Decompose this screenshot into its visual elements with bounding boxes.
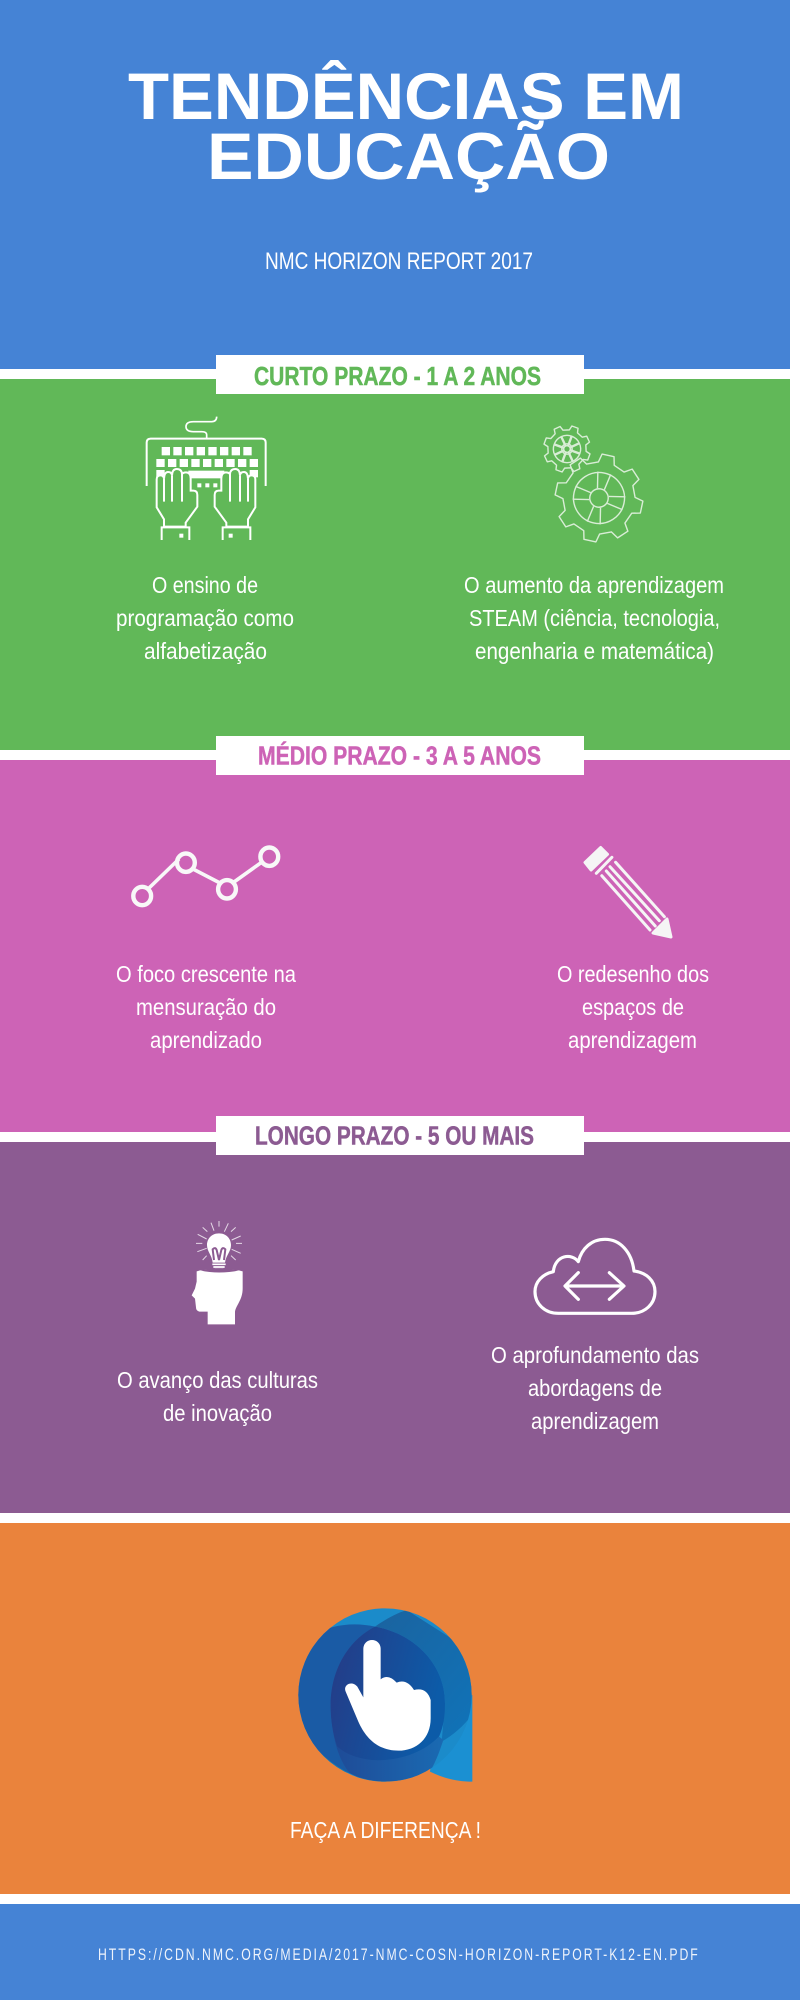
text: steam: O aumento da aprendizagem bbox=[464, 572, 724, 598]
text: redesenho: espaços de bbox=[582, 994, 684, 1020]
heading: médio prazo bbox=[216, 736, 584, 775]
icon: gears bbox=[537, 419, 651, 550]
title bbox=[128, 59, 684, 193]
panel: médio prazo bbox=[0, 760, 790, 1132]
heading: longo prazo bbox=[216, 1116, 584, 1155]
subtitle: NMC HORIZON REPORT 2017 bbox=[265, 248, 533, 275]
heading: curto prazo: CURTO PRAZO - 1 A 2 ANOS bbox=[254, 361, 541, 391]
text: inovação: de inovação bbox=[163, 1400, 272, 1426]
text: abordagens: aprendizagem bbox=[531, 1408, 659, 1434]
panel: call to action bbox=[0, 1523, 790, 1894]
text: programação: programação como bbox=[116, 605, 294, 631]
icon: cloud with arrows bbox=[535, 1239, 655, 1313]
text: redesenho: O redesenho dos bbox=[557, 961, 709, 987]
text: programação bbox=[116, 572, 294, 664]
text: mensuração: O foco crescente na bbox=[116, 961, 296, 987]
heading: curto prazo bbox=[216, 355, 584, 394]
text: inovação bbox=[117, 1367, 318, 1426]
text: mensuração: aprendizado bbox=[150, 1027, 262, 1053]
text: inovação: O avanço das culturas bbox=[117, 1367, 318, 1393]
text: abordagens bbox=[491, 1342, 699, 1434]
heading: longo prazo: LONGO PRAZO - 5 OU MAIS bbox=[255, 1120, 534, 1150]
text: call to action: FAÇA A DIFERENÇA ! bbox=[290, 1817, 481, 1843]
icon: pointing hand in speech bubble bbox=[298, 1608, 472, 1782]
text: mensuração bbox=[116, 961, 296, 1053]
panel: longo prazo bbox=[0, 1142, 790, 1513]
icon: line chart bbox=[133, 848, 278, 905]
panel: footer bbox=[0, 1904, 800, 2000]
text: steam bbox=[464, 572, 724, 664]
panel: header bbox=[0, 0, 790, 369]
text: redesenho bbox=[557, 961, 709, 1053]
icon: keyboard and hands bbox=[147, 417, 266, 540]
text: source url: HTTPS://CDN.NMC.ORG/MEDIA/2017-NMC-COSN-HORIZON-REPORT-K12-EN.PDF bbox=[98, 1946, 698, 1965]
text: programação: alfabetização bbox=[144, 638, 267, 664]
panel: curto prazo bbox=[0, 379, 790, 750]
text: steam: STEAM (ciência, tecnologia, bbox=[469, 605, 720, 631]
icon: pencil bbox=[585, 848, 671, 937]
heading: médio prazo: MÉDIO PRAZO - 3 A 5 ANOS bbox=[258, 740, 541, 770]
title: TENDÊNCIAS EM bbox=[128, 59, 684, 133]
text: steam: engenharia e matemática) bbox=[475, 638, 714, 664]
text: programação: O ensino de bbox=[152, 572, 258, 598]
text: redesenho: aprendizagem bbox=[568, 1027, 697, 1053]
title: EDUCAÇÃO bbox=[207, 119, 610, 193]
text: abordagens: abordagens de bbox=[528, 1375, 662, 1401]
text: mensuração: mensuração do bbox=[136, 994, 276, 1020]
icon: head with light bulb bbox=[192, 1221, 243, 1324]
text: abordagens: O aprofundamento das bbox=[491, 1342, 699, 1368]
